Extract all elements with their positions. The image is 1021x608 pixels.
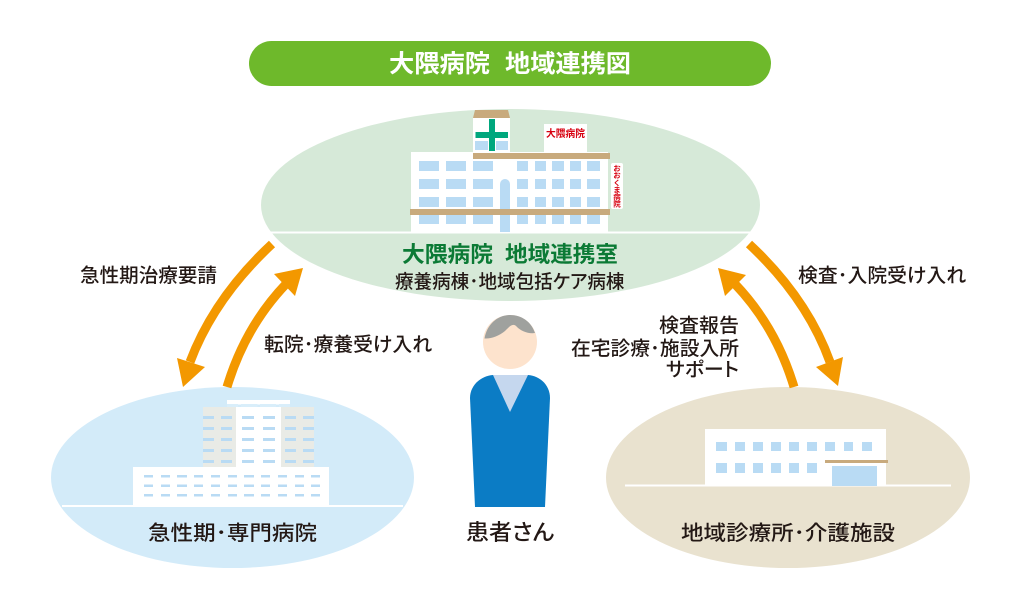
icon: Okuma hospital building: 大隈病院 xyxy=(546,127,585,140)
label: reports and home care support xyxy=(571,315,739,381)
icon: acute care hospital building xyxy=(133,400,329,506)
arrow: acute care request xyxy=(177,244,272,387)
arrow: transfer acceptance xyxy=(227,268,303,387)
label: examination and admission: 検査･入院受け入れ xyxy=(798,265,966,287)
title banner xyxy=(249,41,771,86)
label: reports and home care support: サポート xyxy=(666,359,739,381)
text: wards: 療養病棟･地域包括ケア病棟 xyxy=(395,271,624,293)
panel: acute care hospital ellipse xyxy=(51,387,414,568)
arrow: reports and support xyxy=(718,268,794,387)
text: acute care label: 急性期･専門病院 xyxy=(148,522,317,545)
heading: liaison office: 地域連携室 xyxy=(505,242,618,267)
arrow: examination and admission xyxy=(749,244,843,386)
text: clinics label: 地域診療所･介護施設 xyxy=(681,522,895,545)
icon: clinic building xyxy=(705,429,888,486)
heading: liaison office xyxy=(402,242,618,267)
icon: patient figure xyxy=(470,315,550,507)
label: acute care request: 急性期治療要請 xyxy=(80,265,217,287)
panel: clinics and care facilities ellipse xyxy=(606,387,970,568)
title banner: 大隈病院 xyxy=(389,50,490,78)
label: reports and home care support: 検査報告 xyxy=(659,315,739,337)
label: reports and home care support: 在宅診療･施設入所 xyxy=(571,338,739,360)
heading: liaison office: 大隈病院 xyxy=(402,242,493,267)
icon: Okuma hospital building: おおくま病院 xyxy=(612,164,622,209)
label: transfer acceptance: 転院･療養受け入れ xyxy=(264,334,432,356)
panel: Okuma hospital ellipse xyxy=(261,109,760,301)
icon: Okuma hospital building xyxy=(410,110,623,232)
title banner: 地域連携図 xyxy=(505,50,631,78)
text: patient label: 患者さん xyxy=(466,520,554,545)
